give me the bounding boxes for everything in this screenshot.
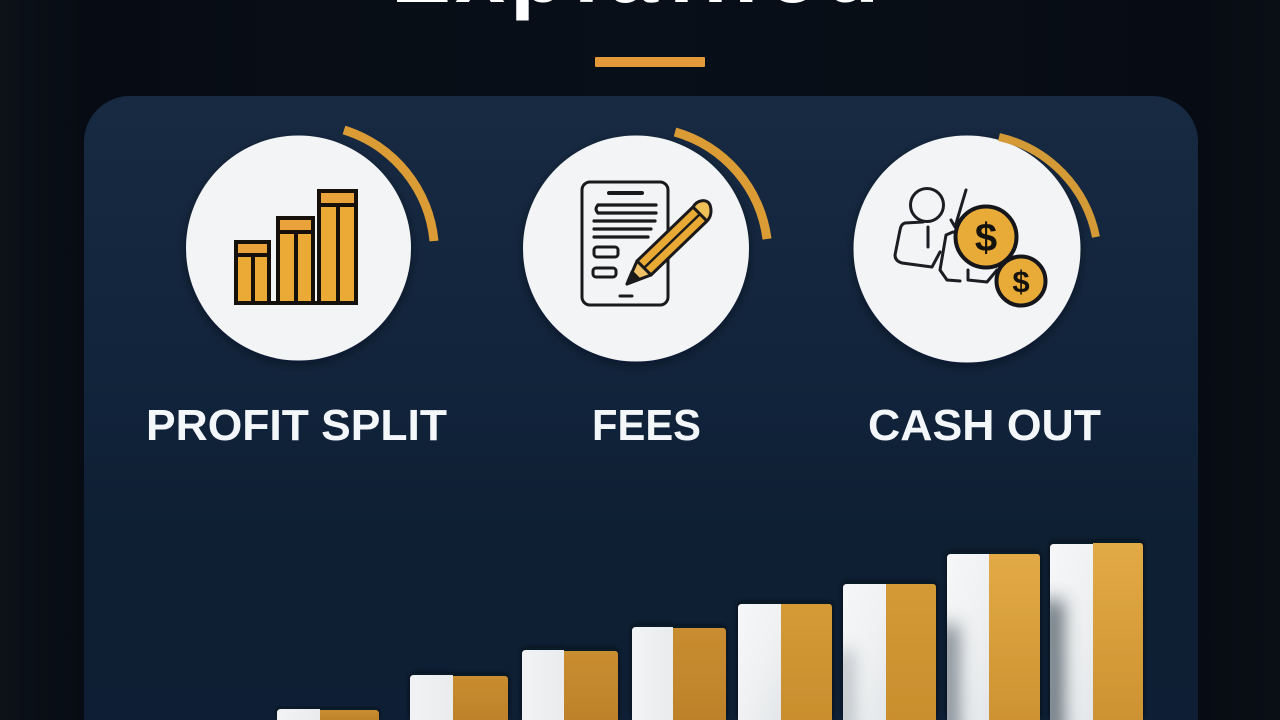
bar 8 (1043, 543, 1143, 720)
circle: fees (523, 136, 749, 362)
icon: rising bars (235, 191, 357, 303)
bar 2 (410, 675, 508, 720)
bar chart (277, 543, 1143, 720)
pencil (627, 201, 711, 284)
coin: small (996, 256, 1046, 306)
arc: profit split (344, 130, 434, 241)
title accent bar (595, 57, 705, 67)
coin: large (956, 206, 1016, 268)
label: profit split: PROFIT SPLIT (146, 401, 447, 450)
circle: profit split (186, 136, 411, 360)
label: cash out: CASH OUT (868, 401, 1101, 450)
dollar sign: large coin: $ (975, 216, 997, 260)
document (582, 182, 668, 305)
bar 5 (738, 604, 832, 720)
icon: people and coins (895, 188, 1046, 306)
arc: cash out (999, 137, 1096, 237)
bar 1 (277, 709, 379, 720)
bar 6 (838, 584, 936, 720)
bar 7 (940, 554, 1040, 720)
panel: main card (84, 96, 1198, 720)
label: fees: FEES (592, 401, 701, 450)
circle: cash out (854, 136, 1080, 362)
people outline (895, 188, 997, 282)
panel: profit split (146, 130, 447, 450)
icon: document and pencil (582, 182, 711, 305)
bar 4 (632, 627, 726, 720)
panel: fees (523, 132, 767, 450)
arc: fees (675, 132, 767, 239)
bar 3 (522, 650, 618, 720)
panel: cash out (854, 136, 1101, 450)
dollar sign: small coin: $ (1012, 264, 1030, 299)
